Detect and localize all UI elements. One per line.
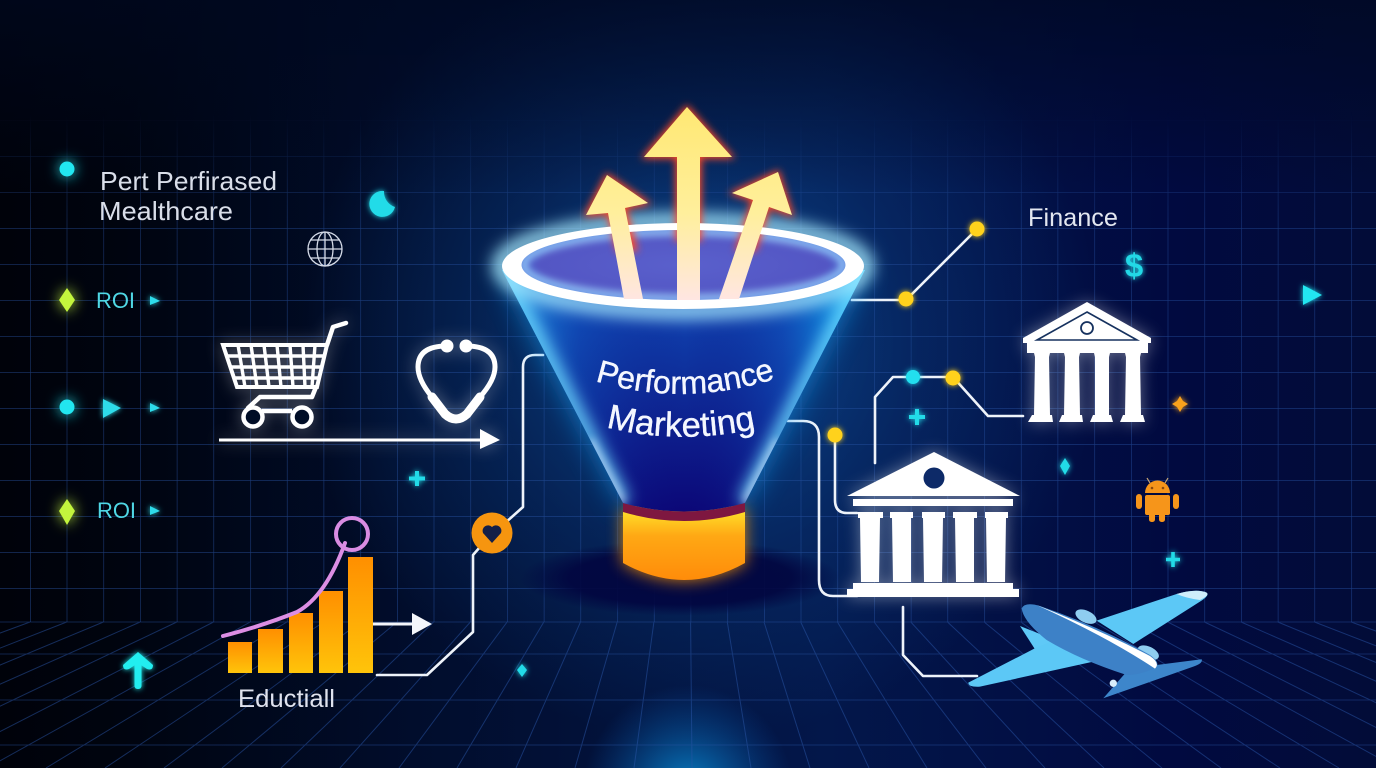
arrow glow <box>586 107 792 250</box>
plus marker: upper right <box>909 409 925 425</box>
arrow from chart <box>373 613 432 635</box>
marker diamond 1 <box>59 288 75 312</box>
marker dot top <box>60 162 74 176</box>
connector nodes <box>828 222 984 442</box>
small triangles <box>103 296 160 515</box>
icon: heart node <box>472 512 512 554</box>
engines <box>1073 606 1099 627</box>
funnel opening <box>520 229 846 301</box>
inner rim glow <box>524 232 844 298</box>
icon: globe <box>308 232 342 266</box>
ROI label 2: ROI <box>97 498 136 523</box>
fuselage <box>1022 604 1157 675</box>
icon: moon <box>369 191 395 217</box>
curve end ring <box>336 518 368 550</box>
bars <box>228 557 373 673</box>
triangle marker right <box>1303 285 1322 305</box>
rim halo <box>500 221 866 311</box>
icon: up arrow <box>123 652 153 689</box>
icon: stethoscope <box>418 340 495 419</box>
funnel floor shadow <box>520 540 840 616</box>
left heading: healthcare <box>99 166 277 226</box>
marker diamond 2 <box>59 499 75 525</box>
icon: android <box>1136 478 1179 522</box>
icon: airplane <box>968 591 1207 698</box>
bar chart <box>223 518 432 673</box>
plus marker: lower right <box>1166 552 1180 567</box>
timeline markers <box>59 162 160 525</box>
base cylinder <box>623 503 745 580</box>
funnel label: Performance <box>597 360 773 394</box>
small diamond bottom <box>517 664 527 677</box>
ROI label 1: ROI <box>96 288 135 313</box>
fuselage stripe <box>1037 605 1157 669</box>
wing: near <box>968 641 1093 687</box>
plus marker left <box>409 471 425 486</box>
wing: far <box>1097 591 1207 644</box>
left heading: healthcare: Pert Perfirased <box>100 166 277 196</box>
icon: bank upper <box>1023 302 1151 422</box>
funnel label: Marketing <box>608 404 754 438</box>
sparkle: orange <box>1172 396 1188 412</box>
icon: shopping cart <box>223 323 346 426</box>
diamond: right <box>1060 458 1070 475</box>
icon: dollar: $ <box>1125 247 1143 284</box>
connector lines: funnel links <box>377 229 1023 676</box>
arrow: cart to funnel <box>219 429 500 449</box>
marker dot middle <box>60 400 74 414</box>
left heading: healthcare: Mealthcare <box>99 196 233 226</box>
chart label: Eductiall <box>238 685 335 713</box>
rising arrows <box>586 107 792 300</box>
growth curve <box>223 543 345 636</box>
icon: bank lower <box>847 452 1020 597</box>
finance heading: Finance <box>1028 204 1118 232</box>
funnel outer glow <box>502 272 865 503</box>
funnel label <box>597 360 773 438</box>
funnel rim <box>502 223 864 309</box>
tail <box>1103 659 1202 698</box>
funnel cone body <box>502 270 865 512</box>
central funnel <box>480 100 885 593</box>
